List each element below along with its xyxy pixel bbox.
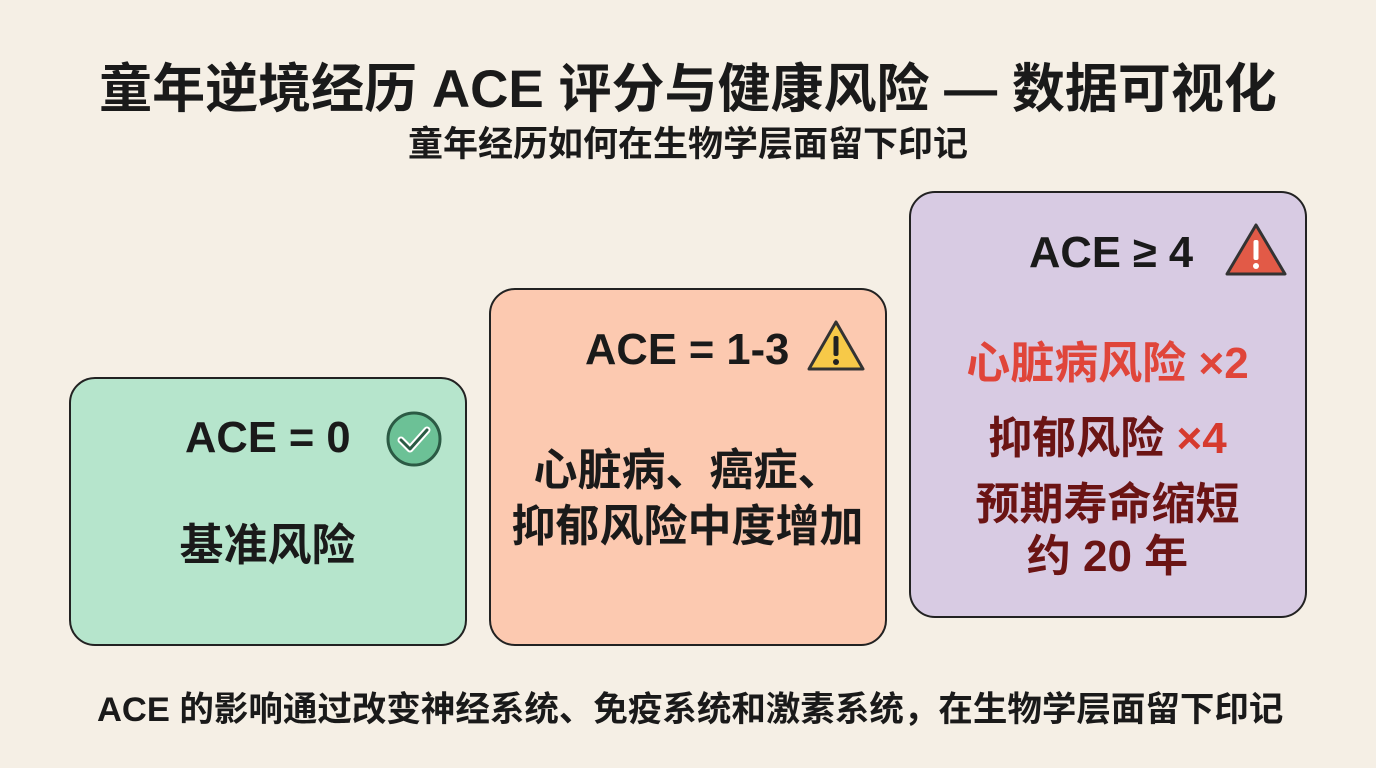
text: moderate risk: 抑郁风险中度增加 [512, 502, 864, 551]
text: heart risk: 心脏病风险 ×2 [966, 339, 1249, 388]
text: life expectancy [976, 480, 1240, 581]
subtitle: 童年经历如何在生物学层面留下印记 [408, 125, 968, 164]
text: life expectancy: 约 20 年 [1027, 532, 1188, 581]
text: moderate risk [512, 446, 864, 551]
heading: ACE = 1-3: ACE = 1-3 [585, 326, 789, 374]
bottom caption: ACE 的影响通过改变神经系统、免疫系统和激素系统，在生物学层面留下印记 [97, 691, 1283, 729]
panel: ACE 1-3 [489, 288, 887, 646]
icon: red warning [1226, 223, 1287, 276]
panel: ACE 0 [69, 377, 467, 646]
text: moderate risk: 心脏病、癌症、 [534, 446, 842, 495]
text: life expectancy: 预期寿命缩短 [976, 480, 1240, 529]
panel: ACE >= 4 [909, 191, 1307, 618]
icon: yellow warning [808, 320, 865, 370]
heading: ACE >= 4: ACE ≥ 4 [1029, 229, 1193, 277]
icon: check [386, 412, 442, 466]
title: 童年逆境经历 ACE 评分与健康风险 — 数据可视化 [99, 60, 1277, 119]
text: depression risk: 抑郁风险 ×4 [988, 414, 1227, 463]
heading: ACE = 0: ACE = 0 [185, 414, 351, 462]
text: baseline risk: 基准风险 [180, 521, 356, 570]
